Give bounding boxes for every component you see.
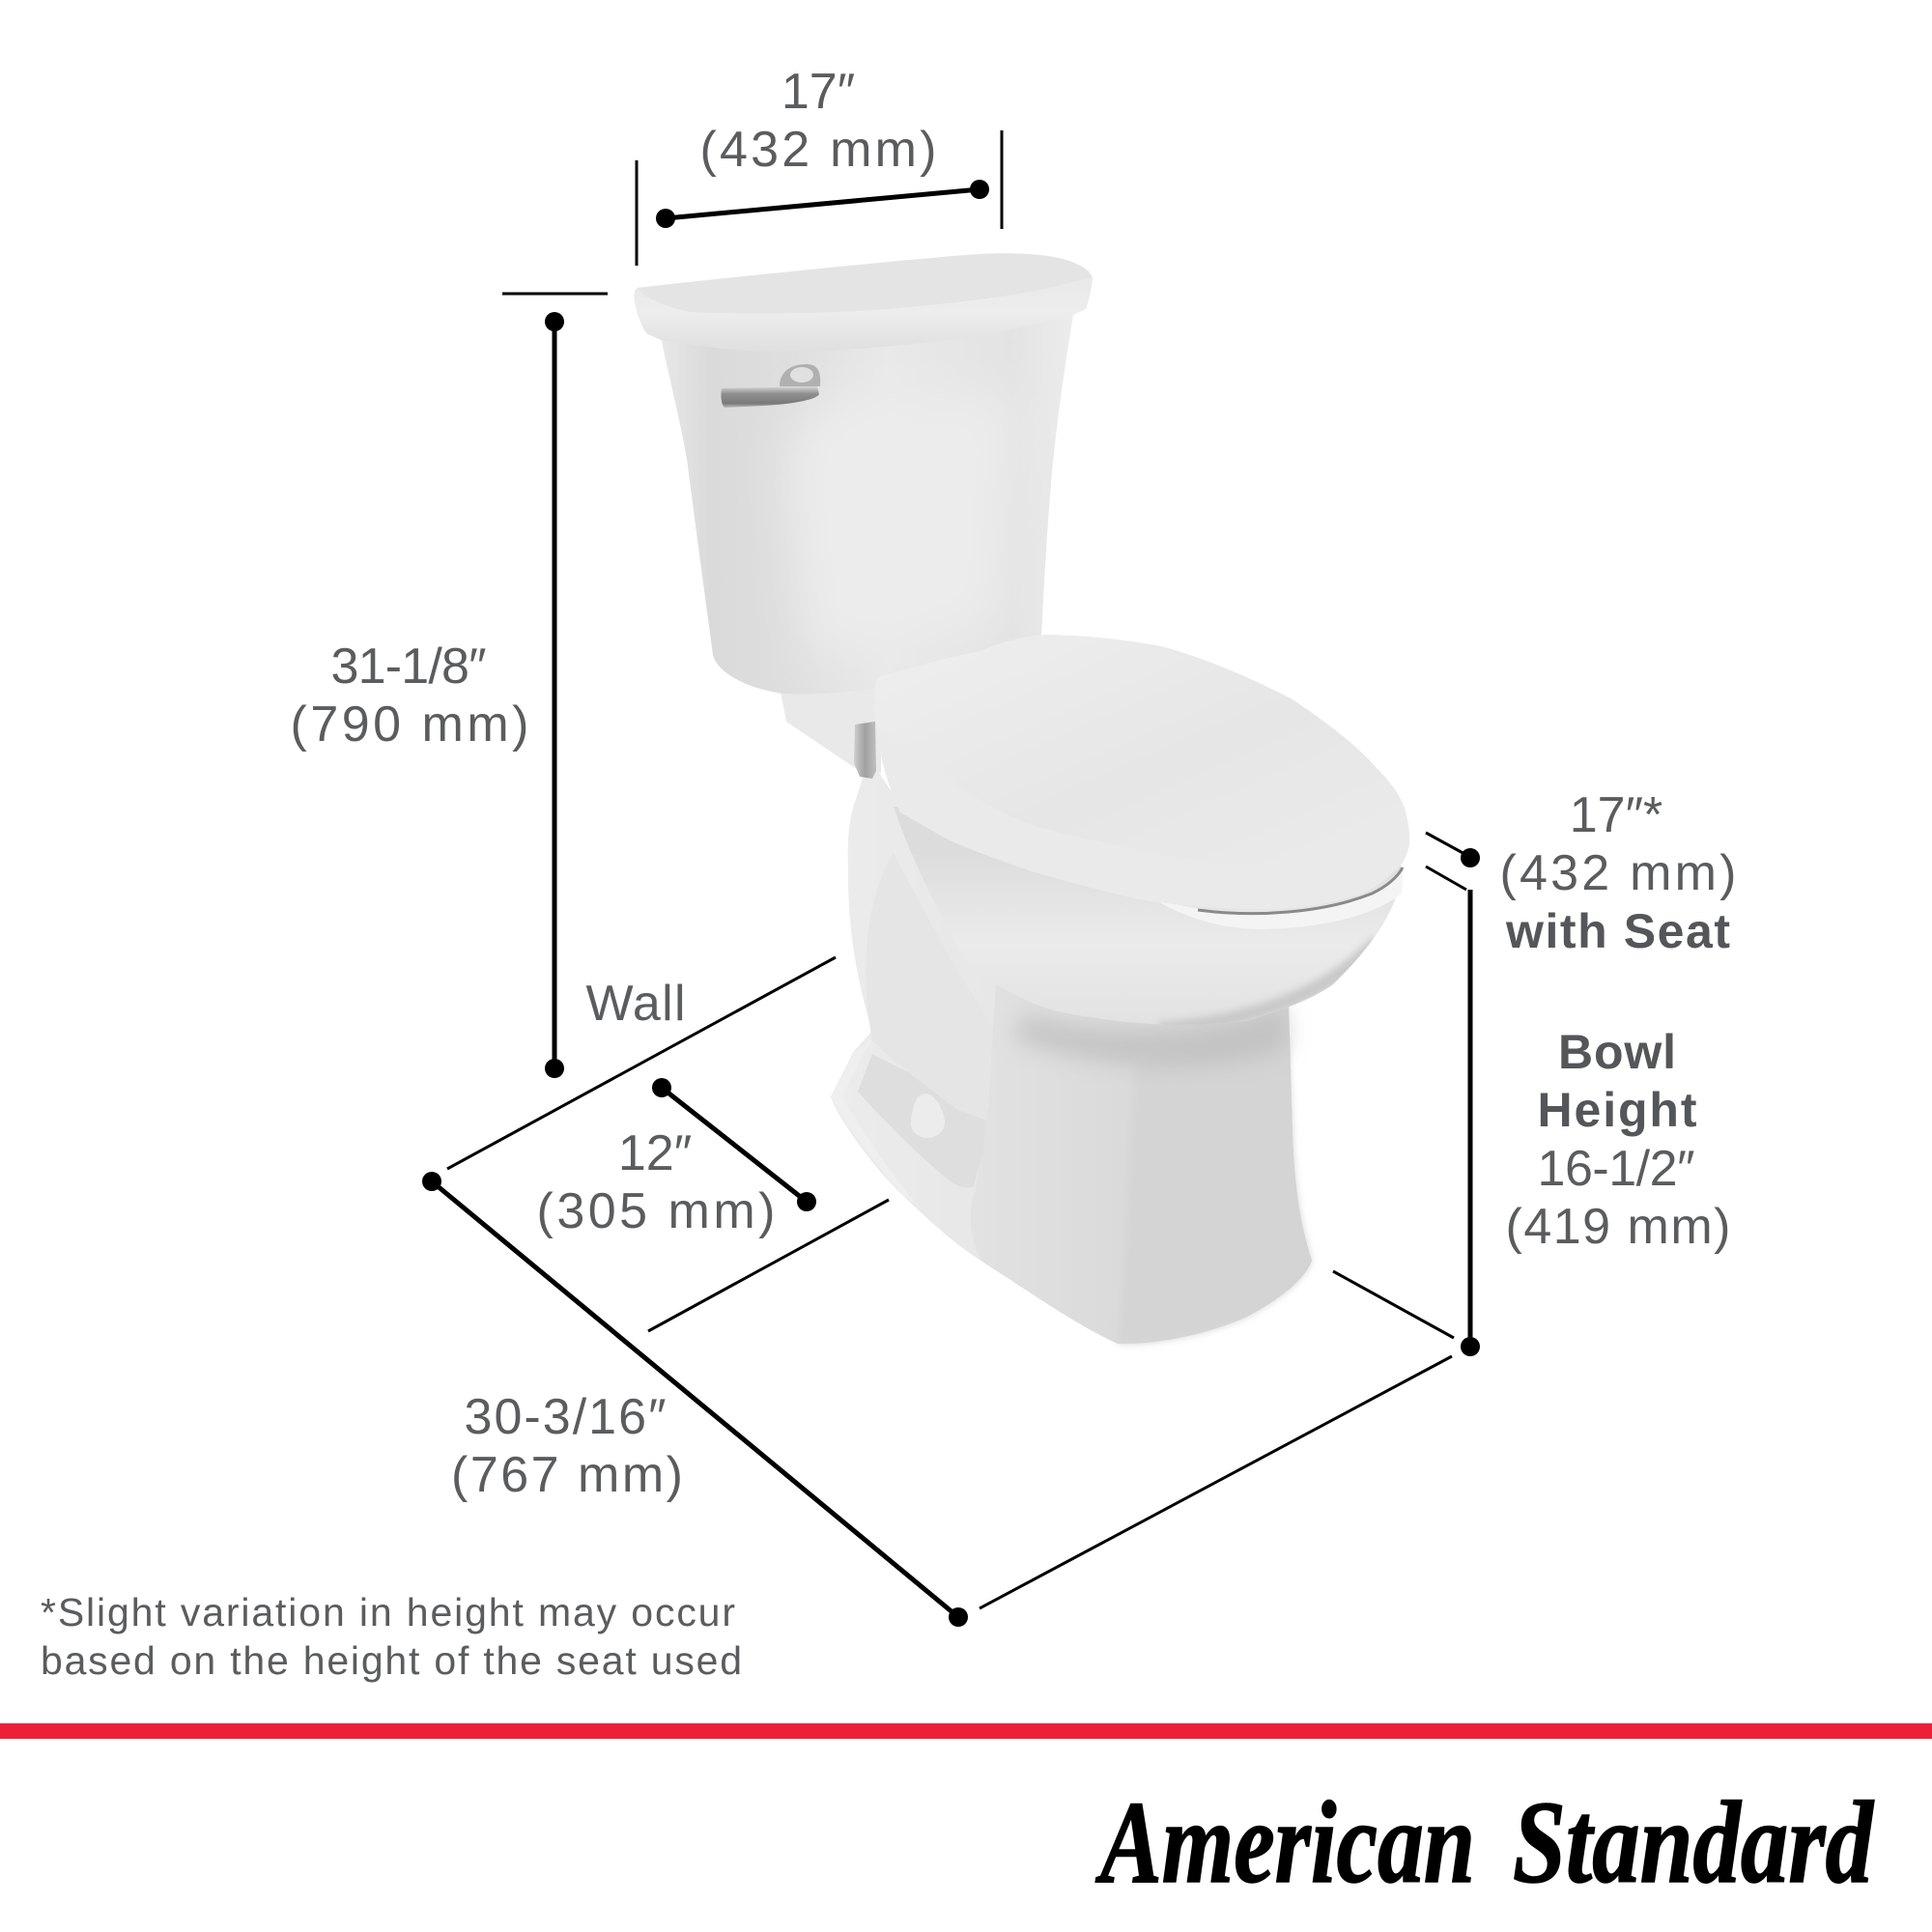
label: rough-in: [537, 1125, 775, 1239]
label: rough-in: (305 mm): [537, 1183, 775, 1239]
bowl rim: [1150, 865, 1404, 929]
tank front face highlight: [787, 396, 1014, 657]
label: tank width: 17″: [781, 64, 855, 120]
dimension: tank width: [637, 64, 1002, 266]
label: overall depth: (767 mm): [451, 1447, 683, 1503]
wall reference line: [447, 957, 836, 1169]
label: height with seat: 17″*: [1570, 787, 1662, 843]
red divider bar: [0, 1723, 1932, 1739]
foot flange edge: [831, 1039, 916, 1204]
label: overall height: 31-1/8″: [330, 639, 487, 695]
dimension: overall height: [290, 294, 608, 1078]
label: bowl height: Height: [1538, 1083, 1697, 1137]
label: height with seat: (432 mm): [1499, 845, 1737, 901]
dimension: overall depth: [422, 1172, 968, 1627]
pedestal front: [971, 966, 1312, 1344]
tank lid: [634, 253, 1093, 352]
label: bowl height: Bowl: [1558, 1025, 1676, 1079]
label: tank width: (432 mm): [699, 122, 937, 178]
seat shadow line: [1198, 867, 1403, 914]
label: wall: Wall: [585, 976, 686, 1032]
footnote: *Slight variation in height may occur: [41, 1590, 735, 1634]
label: overall depth: [451, 1389, 683, 1503]
label: height with seat: with Seat: [1505, 904, 1730, 958]
flush handle: [721, 364, 820, 408]
label: overall height: [290, 639, 529, 753]
seat hinge: [854, 722, 876, 779]
footnote: based on the height of the seat used: [41, 1638, 742, 1683]
toilet product image: [634, 253, 1409, 1344]
dimension: bowl height: [1426, 787, 1737, 1356]
footnote: [41, 1590, 742, 1683]
label: rough-in: 12″: [618, 1125, 692, 1181]
seat lid top surface: [874, 635, 1406, 869]
bolt centre reference line: [648, 1200, 889, 1331]
label: bowl height: 16-1/2″: [1538, 1141, 1694, 1197]
brand logo: American: [1095, 1777, 1475, 1908]
under-bowl shadow: [1014, 1005, 1287, 1065]
tank body: [661, 315, 1073, 695]
label: bowl height: (419 mm): [1505, 1199, 1731, 1255]
trapway flare: [866, 853, 993, 1121]
tank lid top surface: [638, 253, 1092, 313]
bowl: [894, 807, 1401, 1025]
front floor reference lines: [980, 1271, 1454, 1608]
brand logo: [1095, 1777, 1875, 1908]
label: overall depth: 30-3/16″: [464, 1389, 667, 1445]
seat lid: [873, 635, 1409, 909]
pedestal side plane: [1118, 1038, 1312, 1344]
label: height with seat: [1499, 787, 1737, 958]
foot recess: [858, 1054, 986, 1188]
bowl back body: [831, 758, 1312, 1344]
dimension: rough-in: [537, 1078, 816, 1239]
bolt cap: [911, 1094, 945, 1138]
bowl lower shading: [1159, 942, 1377, 1029]
label: bowl height: [1505, 1025, 1731, 1255]
label: overall height: (790 mm): [290, 696, 529, 753]
label: tank width: [699, 64, 937, 178]
tank neck: [781, 688, 881, 773]
